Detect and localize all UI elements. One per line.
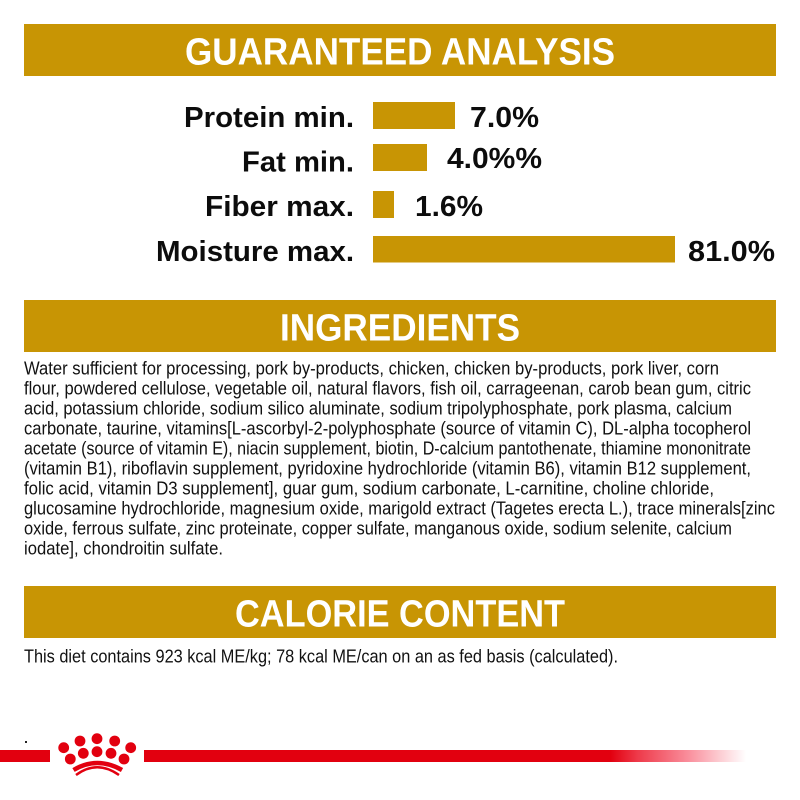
text block: ingredients list: Water sufficient for processing, pork by-products, chicken, chicken by-products, pork liver, corn [24, 358, 719, 378]
text block: ingredients list: flour, powdered cellulose, vegetable oil, natural flavors, fish oil, carrageenan, carob bean gum, citric [24, 378, 751, 398]
row: fat [242, 143, 542, 178]
text block: ingredients list: iodate], chondroitin sulfate. [24, 538, 223, 558]
row: fiber: 1.6% [415, 191, 483, 223]
text block: ingredients list: oxide, ferrous sulfate, zinc proteinate, copper sulfate, manganous oxide, sodium selenite, calcium [24, 518, 732, 538]
row: moisture: Moisture max. [156, 236, 354, 268]
row: fiber: Fiber max. [205, 191, 354, 223]
row: moisture [156, 236, 775, 268]
panel: calorie content header: CALORIE CONTENT [235, 594, 565, 636]
text block: calorie content: This diet contains 923 kcal ME/kg; 78 kcal ME/can on an as fed basis (calculated). [24, 646, 618, 666]
row: fat: Fat min. [242, 146, 354, 178]
icon: royal canin crown logo [58, 733, 136, 775]
bar chart: guaranteed analysis [156, 102, 775, 268]
row: moisture: 81.0% [688, 236, 775, 268]
left red stripe [0, 750, 50, 762]
text block: ingredients list: acid, potassium chloride, sodium silico aluminate, sodium tripolyphosphate, pork plasma, calcium [24, 398, 732, 418]
row: fat: 4.0%% [447, 143, 542, 175]
text block: ingredients list: carbonate, taurine, vitamins[L-ascorbyl-2-polyphosphate (source of vitamin C), DL-alpha tocopherol [24, 418, 751, 438]
panel: ingredients header: INGREDIENTS [280, 308, 520, 350]
row: protein: 7.0% [470, 102, 539, 134]
text block: ingredients list: (vitamin B1), riboflavin supplement, pyridoxine hydrochloride (vitamin B6), vitamin B12 supplement, [24, 458, 751, 478]
row: fiber [205, 191, 483, 223]
right red stripe [144, 750, 746, 762]
panel: calorie content header [24, 586, 776, 638]
panel: ingredients header [24, 300, 776, 352]
footer dot [25, 741, 27, 743]
row: protein [184, 102, 539, 134]
panel: guaranteed analysis header: GUARANTEED ANALYSIS [185, 32, 615, 74]
row: protein: Protein min. [184, 102, 354, 134]
panel: guaranteed analysis header [24, 24, 776, 76]
text block: ingredients list [24, 358, 775, 558]
text block: ingredients list: folic acid, vitamin D3 supplement], guar gum, sodium carbonate, L-carnitine, choline chloride, [24, 478, 714, 498]
